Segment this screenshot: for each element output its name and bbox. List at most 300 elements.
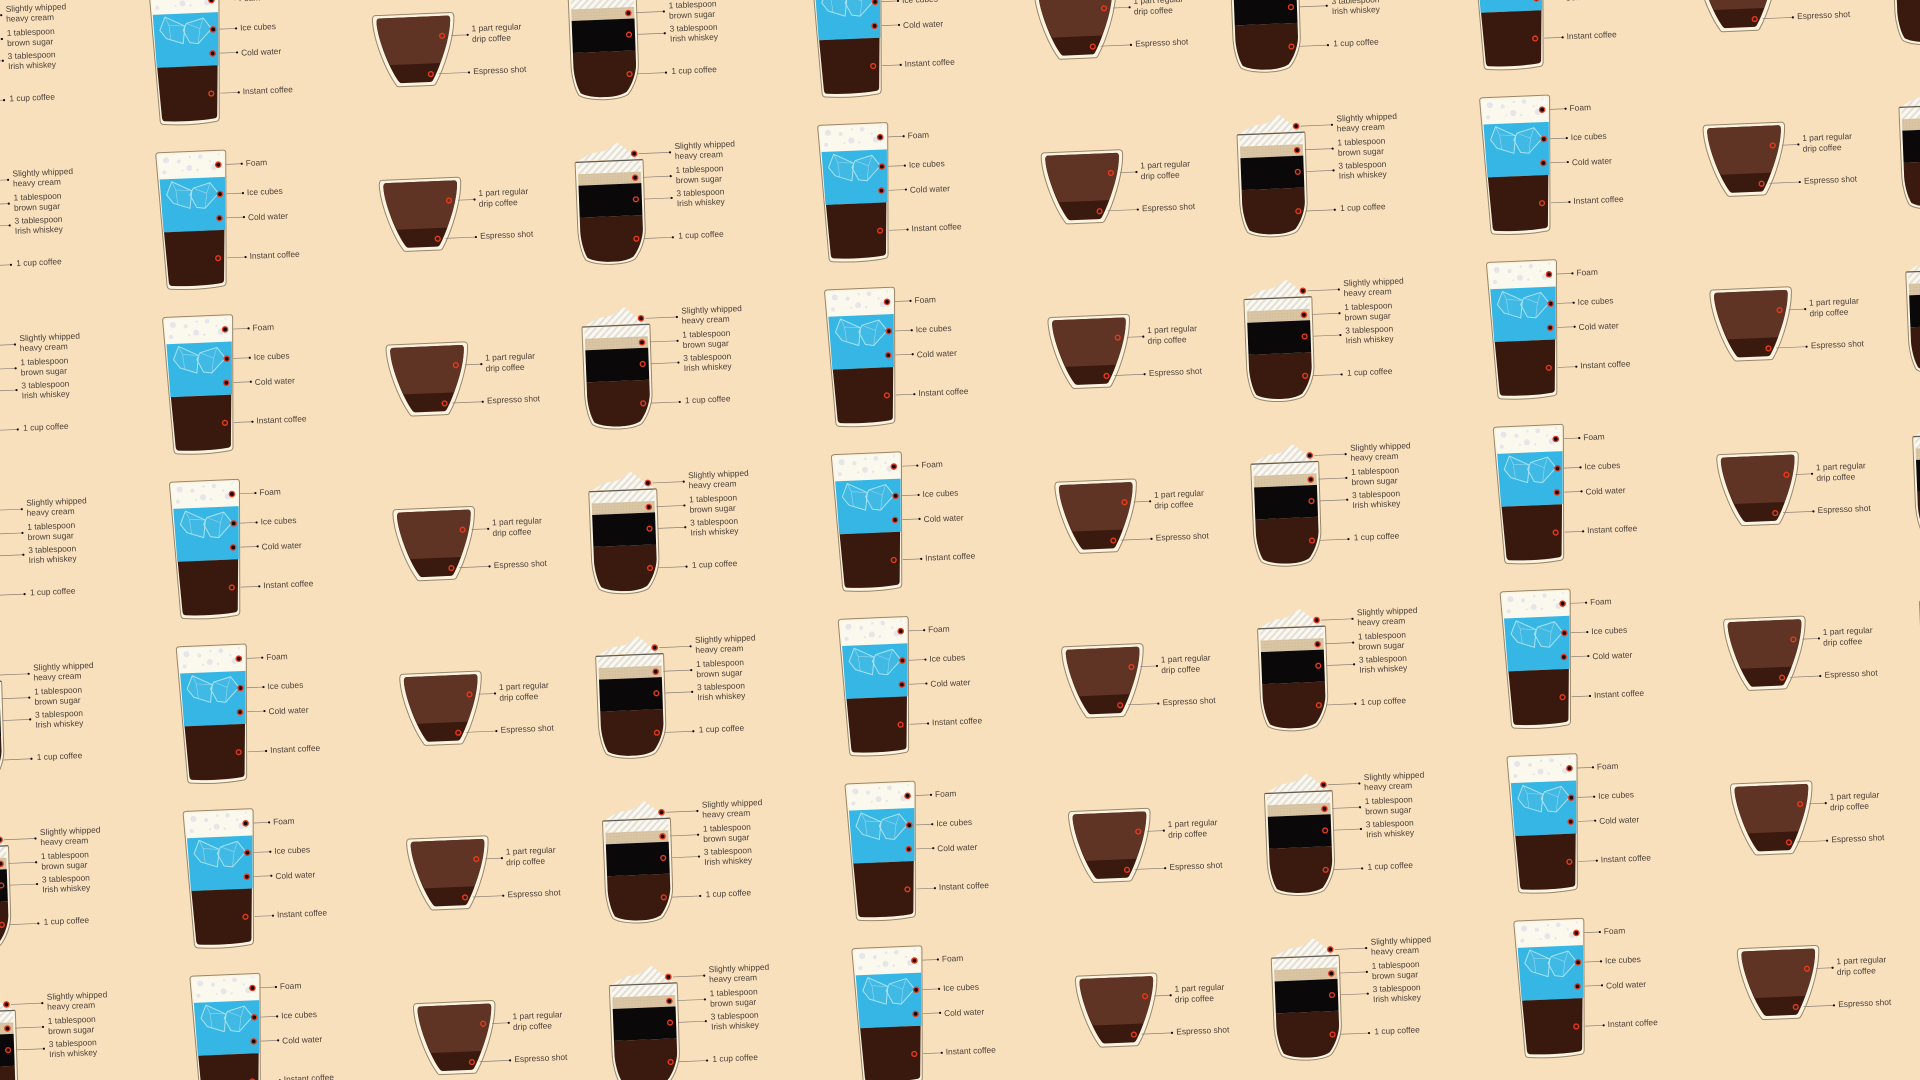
iced coffee pint diagram: Instant coffee: [1607, 1017, 1658, 1029]
iced coffee pint diagram: Ice cubes: [943, 982, 979, 993]
irish coffee diagram: heavy cream: [1371, 945, 1419, 957]
irish coffee diagram: 1 tablespoon: [703, 822, 751, 834]
irish coffee diagram: Irish whiskey: [28, 553, 78, 565]
irish coffee diagram: Irish whiskey: [35, 718, 84, 730]
irish coffee diagram: 3 tablespoon: [1372, 982, 1421, 994]
iced coffee pint diagram: Ice cubes: [922, 488, 959, 499]
iced coffee pint diagram: Instant coffee: [277, 907, 328, 920]
iced coffee pint diagram: Foam: [280, 980, 302, 991]
espresso cup diagram: Espresso shot: [473, 64, 527, 76]
irish coffee diagram: 3 tablespoon: [49, 1037, 97, 1049]
irish coffee diagram: 1 tablespoon: [709, 986, 758, 998]
irish coffee diagram: Irish whiskey: [677, 196, 726, 208]
iced coffee pint diagram: Cold water: [1592, 650, 1633, 661]
iced coffee pint diagram: [190, 970, 336, 1080]
espresso cup diagram: Espresso shot: [500, 723, 555, 735]
iced coffee pint diagram: [183, 806, 329, 949]
irish coffee diagram: 1 cup coffee: [699, 723, 745, 735]
iced coffee pint diagram: [156, 147, 301, 291]
iced coffee pint diagram: Cold water: [917, 348, 957, 359]
espresso cup diagram: Espresso shot: [1804, 174, 1858, 186]
iced coffee pint diagram: Instant coffee: [270, 743, 321, 755]
espresso cup diagram: 1 part regular: [1809, 296, 1859, 308]
iced coffee pint diagram: Foam: [273, 816, 295, 827]
irish coffee diagram: 1 cup coffee: [30, 586, 76, 597]
irish coffee diagram: 3 tablespoon: [704, 845, 752, 857]
espresso cup diagram: Espresso shot: [1811, 338, 1865, 350]
iced coffee pint diagram: Foam: [259, 486, 281, 497]
irish coffee diagram: Slightly whipped: [688, 468, 749, 480]
espresso cup diagram: drip coffee: [506, 856, 546, 867]
irish coffee diagram: heavy cream: [1364, 780, 1412, 792]
iced coffee pint diagram: Cold water: [1578, 320, 1619, 332]
irish coffee diagram: [581, 302, 747, 430]
iced coffee pint diagram: Ice cubes: [915, 323, 952, 334]
iced coffee pint diagram: Foam: [1590, 596, 1612, 607]
espresso cup diagram: 1 part regular: [1836, 954, 1886, 966]
espresso cup diagram: drip coffee: [1161, 664, 1201, 675]
iced coffee pint diagram: Foam: [1597, 761, 1619, 772]
espresso cup diagram: drip coffee: [479, 197, 518, 209]
espresso cup diagram: drip coffee: [1830, 801, 1870, 812]
iced coffee pint diagram: Foam: [1569, 102, 1591, 113]
espresso cup diagram: 1 part regular: [478, 186, 528, 198]
irish coffee diagram: brown sugar: [676, 173, 722, 185]
irish coffee diagram: brown sugar: [1338, 146, 1384, 158]
iced coffee pint diagram: [1486, 257, 1632, 400]
irish coffee diagram: 3 tablespoon: [35, 708, 84, 720]
espresso cup diagram: Espresso shot: [1831, 832, 1885, 844]
irish coffee diagram: Irish whiskey: [1339, 169, 1388, 181]
iced coffee pint diagram: Foam: [921, 459, 943, 470]
irish coffee diagram: Irish whiskey: [1345, 333, 1395, 345]
iced coffee pint diagram: Foam: [245, 157, 267, 168]
espresso cup diagram: drip coffee: [1823, 636, 1863, 648]
irish coffee diagram: Irish whiskey: [1332, 4, 1381, 16]
irish coffee diagram: Slightly whipped: [26, 495, 87, 508]
iced coffee pint diagram: Instant coffee: [263, 578, 314, 590]
irish coffee diagram: 1 cup coffee: [712, 1052, 758, 1064]
irish coffee diagram: 1 tablespoon: [41, 849, 89, 861]
irish coffee glass at right edge: [1919, 579, 1920, 705]
irish coffee diagram: 3 tablespoon: [683, 351, 732, 363]
irish coffee diagram: Irish whiskey: [711, 1020, 760, 1032]
irish coffee diagram: brown sugar: [1351, 475, 1398, 487]
irish coffee diagram: 3 tablespoon: [676, 186, 725, 198]
irish coffee diagram: [609, 961, 774, 1080]
espresso cup diagram: [1068, 805, 1224, 884]
irish coffee diagram: 1 tablespoon: [6, 26, 55, 38]
iced coffee pint diagram: [163, 312, 308, 455]
irish coffee diagram: Slightly whipped: [695, 632, 756, 645]
irish coffee diagram: [588, 467, 754, 595]
irish coffee diagram: 3 tablespoon: [1345, 323, 1394, 335]
iced coffee pint diagram: Instant coffee: [249, 249, 300, 261]
espresso cup diagram: drip coffee: [492, 526, 532, 538]
iced coffee pint diagram: [1493, 421, 1639, 565]
espresso cup diagram: [372, 9, 528, 88]
irish coffee glass at right edge: [1912, 415, 1920, 540]
irish coffee diagram: Slightly whipped: [40, 825, 101, 837]
irish coffee diagram: Slightly whipped: [681, 303, 742, 316]
espresso cup diagram: Espresso shot: [1169, 860, 1223, 872]
irish coffee diagram: 3 tablespoon: [690, 516, 739, 528]
iced coffee pint diagram: [1473, 0, 1618, 71]
irish coffee diagram: 1 tablespoon: [689, 492, 738, 504]
iced coffee pint diagram: Ice cubes: [254, 350, 290, 362]
espresso cup diagram: drip coffee: [485, 362, 525, 373]
irish coffee diagram: brown sugar: [683, 338, 729, 350]
espresso cup diagram: Espresso shot: [1838, 997, 1892, 1009]
iced coffee pint diagram: Ice cubes: [1591, 625, 1627, 636]
espresso cup diagram: drip coffee: [1802, 142, 1842, 154]
espresso cup diagram: Espresso shot: [1142, 201, 1196, 213]
espresso cup diagram: 1 part regular: [1829, 790, 1880, 802]
iced coffee pint diagram: Foam: [928, 624, 950, 634]
irish coffee diagram: 1 cup coffee: [1354, 530, 1400, 542]
iced coffee pint diagram: Cold water: [268, 705, 309, 716]
iced coffee pint diagram: Cold water: [282, 1034, 323, 1046]
espresso cup diagram: 1 part regular: [492, 515, 542, 527]
irish coffee diagram: 1 cup coffee: [9, 92, 55, 103]
irish coffee diagram: Slightly whipped: [1357, 605, 1418, 617]
iced coffee pint diagram: Instant coffee: [256, 413, 307, 426]
espresso cup diagram: [413, 997, 569, 1076]
irish coffee diagram: [602, 796, 767, 924]
irish coffee diagram: heavy cream: [1337, 121, 1385, 133]
iced coffee pint diagram: [824, 284, 970, 428]
iced coffee pint diagram: Instant coffee: [1580, 358, 1631, 371]
irish coffee diagram: Irish whiskey: [683, 361, 733, 373]
irish coffee diagram: [1243, 275, 1409, 403]
espresso cup diagram: Espresso shot: [494, 558, 548, 570]
iced coffee pint diagram: [176, 641, 322, 785]
irish coffee diagram: heavy cream: [6, 12, 54, 24]
irish coffee diagram: heavy cream: [709, 972, 757, 984]
iced coffee pint diagram: [811, 0, 956, 98]
iced coffee pint diagram: Ice cubes: [281, 1009, 317, 1021]
iced coffee pint diagram: Instant coffee: [243, 84, 293, 96]
irish coffee glass at right edge: [1891, 0, 1920, 46]
espresso cup diagram: drip coffee: [1175, 993, 1214, 1005]
irish coffee diagram: heavy cream: [702, 808, 750, 820]
irish coffee diagram: Irish whiskey: [22, 388, 71, 400]
irish coffee diagram: brown sugar: [696, 667, 743, 679]
iced coffee pint diagram: Cold water: [930, 677, 971, 689]
irish coffee diagram: 3 tablespoon: [28, 543, 77, 555]
iced coffee pint diagram: [818, 120, 963, 263]
espresso cup diagram: drip coffee: [499, 691, 539, 703]
irish coffee diagram: 1 tablespoon: [696, 657, 744, 669]
espresso cup diagram: drip coffee: [1154, 499, 1194, 511]
espresso cup diagram: [1041, 147, 1196, 225]
iced coffee pint diagram: Ice cubes: [260, 515, 297, 527]
irish coffee diagram: Irish whiskey: [1366, 827, 1415, 839]
irish coffee diagram: heavy cream: [1357, 615, 1405, 627]
irish coffee diagram: [1264, 769, 1429, 897]
irish coffee diagram: brown sugar: [1372, 969, 1419, 981]
iced coffee pint diagram: Ice cubes: [929, 652, 965, 664]
espresso cup diagram: drip coffee: [1837, 965, 1876, 977]
espresso cup diagram: [1075, 970, 1230, 1048]
espresso cup diagram: [1062, 641, 1217, 719]
irish coffee diagram: 1 cup coffee: [1340, 201, 1386, 213]
iced coffee pint diagram: Cold water: [937, 842, 978, 853]
irish coffee diagram: Slightly whipped: [702, 797, 763, 810]
iced coffee pint diagram: Instant coffee: [939, 880, 990, 892]
irish coffee diagram: heavy cream: [695, 643, 744, 655]
irish coffee diagram: [0, 330, 85, 458]
iced coffee pint diagram: Cold water: [275, 869, 316, 881]
espresso cup diagram: [1717, 448, 1872, 527]
iced coffee pint diagram: Cold water: [1606, 979, 1646, 991]
irish coffee diagram: brown sugar: [710, 997, 757, 1009]
espresso cup diagram: 1 part regular: [1174, 982, 1224, 994]
espresso cup diagram: [1055, 476, 1210, 554]
iced coffee pint diagram: Cold water: [255, 375, 295, 387]
irish coffee diagram: [567, 0, 733, 101]
espresso cup diagram: Espresso shot: [487, 393, 541, 405]
irish coffee diagram: brown sugar: [21, 366, 67, 377]
irish coffee diagram: 1 tablespoon: [13, 191, 62, 203]
irish coffee diagram: [0, 988, 112, 1080]
irish coffee diagram: Irish whiskey: [1373, 992, 1422, 1004]
espresso cup diagram: [1710, 284, 1865, 362]
irish coffee diagram: brown sugar: [703, 832, 750, 844]
irish coffee diagram: 1 cup coffee: [1347, 366, 1393, 378]
irish coffee diagram: 1 tablespoon: [1344, 300, 1393, 312]
espresso cup diagram: Espresso shot: [1824, 668, 1878, 680]
espresso cup diagram: drip coffee: [1809, 307, 1849, 318]
irish coffee diagram: Slightly whipped: [12, 166, 73, 178]
irish coffee diagram: [0, 824, 106, 952]
espresso cup diagram: 1 part regular: [1823, 625, 1873, 637]
espresso cup diagram: 1 part regular: [506, 845, 556, 857]
irish coffee diagram: 1 cup coffee: [37, 750, 83, 762]
irish coffee diagram: 3 tablespoon: [1366, 817, 1414, 829]
irish coffee diagram: 1 tablespoon: [1337, 136, 1386, 148]
irish coffee diagram: brown sugar: [41, 860, 88, 871]
irish coffee diagram: 1 cup coffee: [678, 229, 724, 241]
irish coffee diagram: Slightly whipped: [5, 1, 66, 14]
iced coffee pint diagram: [831, 449, 977, 592]
iced coffee pint diagram: Foam: [907, 130, 929, 140]
irish coffee diagram: 3 tablespoon: [1338, 159, 1387, 171]
iced coffee pint diagram: Ice cubes: [274, 844, 310, 856]
espresso cup diagram: [379, 174, 534, 252]
espresso cup diagram: 1 part regular: [1147, 323, 1197, 335]
espresso cup diagram: drip coffee: [513, 1020, 552, 1032]
irish coffee diagram: 3 tablespoon: [1352, 488, 1401, 500]
irish coffee diagram: 3 tablespoon: [1359, 653, 1407, 665]
irish coffee diagram: [1257, 604, 1423, 732]
iced coffee pint diagram: Foam: [914, 294, 936, 305]
espresso cup diagram: drip coffee: [1134, 5, 1173, 17]
irish coffee diagram: [0, 0, 71, 129]
irish coffee diagram: heavy cream: [682, 314, 730, 326]
iced coffee pint diagram: Instant coffee: [932, 715, 983, 727]
irish coffee diagram: Irish whiskey: [704, 855, 753, 867]
irish coffee diagram: Irish whiskey: [49, 1047, 98, 1059]
iced coffee pint diagram: Instant coffee: [911, 221, 962, 233]
iced coffee pint diagram: Ice cubes: [1577, 295, 1614, 307]
espresso cup diagram: [406, 833, 562, 911]
espresso cup diagram: [1696, 0, 1851, 33]
espresso cup diagram: 1 part regular: [1140, 158, 1190, 171]
irish coffee diagram: Slightly whipped: [33, 660, 94, 672]
iced coffee pint diagram: Instant coffee: [1573, 194, 1624, 206]
iced coffee pint diagram: Ice cubes: [1584, 460, 1621, 472]
irish coffee diagram: Irish whiskey: [690, 526, 739, 538]
iced coffee pint diagram: Ice cubes: [240, 21, 276, 33]
irish coffee diagram: [0, 494, 92, 623]
irish coffee diagram: [1250, 439, 1416, 568]
irish coffee diagram: 1 cup coffee: [1367, 860, 1413, 872]
irish coffee diagram: heavy cream: [26, 506, 75, 518]
iced coffee pint diagram: Cold water: [248, 211, 288, 222]
irish coffee diagram: Slightly whipped: [19, 331, 80, 343]
irish coffee diagram: 1 cup coffee: [685, 393, 731, 405]
irish coffee diagram: [0, 659, 99, 787]
espresso cup diagram: drip coffee: [1147, 334, 1187, 346]
irish coffee diagram: 1 tablespoon: [1365, 794, 1413, 806]
irish coffee diagram: 1 tablespoon: [48, 1014, 96, 1026]
irish coffee diagram: heavy cream: [675, 149, 723, 161]
espresso cup diagram: [1737, 942, 1892, 1021]
irish coffee diagram: [0, 165, 78, 293]
irish coffee diagram: Slightly whipped: [1364, 770, 1424, 782]
irish coffee diagram: heavy cream: [47, 1000, 95, 1012]
irish coffee diagram: Irish whiskey: [670, 32, 719, 44]
espresso cup diagram: 1 part regular: [1802, 131, 1852, 143]
irish coffee diagram: 1 cup coffee: [692, 558, 738, 570]
espresso cup diagram: Espresso shot: [480, 229, 534, 241]
iced coffee pint diagram: Foam: [1583, 431, 1605, 442]
irish coffee diagram: Slightly whipped: [1343, 276, 1404, 288]
iced coffee pint diagram: Instant coffee: [1601, 852, 1651, 864]
irish coffee diagram: Irish whiskey: [697, 690, 746, 702]
espresso cup diagram: [1048, 311, 1203, 390]
espresso cup diagram: drip coffee: [1141, 170, 1180, 181]
iced coffee pint diagram: Instant coffee: [1594, 688, 1645, 700]
espresso cup diagram: Espresso shot: [1817, 503, 1872, 515]
iced coffee pint diagram: Foam: [942, 953, 963, 964]
espresso cup diagram: [1730, 778, 1886, 856]
iced coffee pint diagram: Cold water: [1585, 485, 1626, 497]
irish coffee diagram: Irish whiskey: [1359, 663, 1408, 675]
espresso cup diagram: Espresso shot: [1156, 530, 1210, 543]
irish coffee diagram: brown sugar: [48, 1024, 95, 1036]
irish coffee diagram: Irish whiskey: [8, 59, 57, 71]
iced coffee pint diagram: [1507, 751, 1653, 894]
irish coffee diagram: 1 tablespoon: [20, 355, 69, 367]
irish coffee diagram: 1 tablespoon: [27, 520, 76, 532]
iced coffee pint diagram: Ice cubes: [247, 186, 283, 197]
irish coffee diagram: 1 cup coffee: [1333, 37, 1379, 48]
irish coffee diagram: heavy cream: [33, 670, 82, 682]
irish coffee diagram: heavy cream: [688, 478, 737, 490]
iced coffee pint diagram: Ice cubes: [909, 158, 945, 170]
irish coffee diagram: brown sugar: [669, 9, 716, 21]
irish coffee diagram: Slightly whipped: [1350, 440, 1411, 453]
espresso cup diagram: [393, 503, 548, 582]
espresso cup diagram: 1 part regular: [471, 21, 521, 33]
irish coffee diagram: heavy cream: [1350, 451, 1399, 463]
irish coffee diagram: [1236, 110, 1402, 238]
iced coffee pint diagram: Instant coffee: [925, 551, 976, 563]
espresso cup diagram: Espresso shot: [1176, 1024, 1230, 1037]
irish coffee diagram: 3 tablespoon: [697, 680, 745, 692]
espresso cup diagram: 1 part regular: [1816, 460, 1866, 472]
iced coffee pint diagram: Cold water: [1599, 814, 1640, 826]
irish coffee diagram: 3 tablespoon: [21, 378, 70, 390]
irish coffee diagram: 3 tablespoon: [7, 49, 56, 61]
irish coffee diagram: 3 tablespoon: [669, 22, 718, 34]
iced coffee pint diagram: Instant coffee: [1587, 523, 1638, 535]
iced coffee pint diagram: Foam: [252, 322, 274, 333]
irish coffee diagram: 1 tablespoon: [675, 163, 724, 175]
irish coffee diagram: brown sugar: [34, 695, 81, 707]
espresso cup diagram: Espresso shot: [1797, 9, 1851, 21]
iced coffee pint diagram: Instant coffee: [1566, 29, 1617, 41]
irish coffee diagram: Slightly whipped: [47, 989, 107, 1002]
irish coffee diagram: 3 tablespoon: [42, 872, 90, 884]
irish coffee diagram: brown sugar: [1344, 311, 1391, 322]
iced coffee pint diagram: Cold water: [944, 1006, 985, 1018]
irish coffee diagram: heavy cream: [1343, 286, 1392, 298]
irish coffee diagram: 1 tablespoon: [682, 328, 731, 340]
iced coffee pint diagram: [845, 778, 991, 922]
irish coffee diagram: 1 cup coffee: [1374, 1024, 1420, 1036]
espresso cup diagram: drip coffee: [1168, 828, 1208, 840]
espresso cup diagram: [1703, 119, 1858, 197]
irish coffee diagram: [574, 138, 740, 266]
irish coffee diagram: 1 cup coffee: [23, 421, 69, 433]
irish coffee diagram: Slightly whipped: [708, 962, 769, 974]
irish coffee diagram: 1 cup coffee: [671, 64, 717, 76]
irish coffee glass at right edge: [1905, 250, 1920, 375]
irish coffee diagram: [1270, 933, 1436, 1061]
irish coffee diagram: brown sugar: [14, 201, 60, 213]
espresso cup diagram: [400, 668, 555, 746]
irish coffee diagram: Slightly whipped: [1370, 934, 1431, 947]
irish coffee diagram: heavy cream: [40, 835, 88, 847]
espresso cup diagram: Espresso shot: [1162, 695, 1216, 707]
irish coffee diagram: brown sugar: [1365, 805, 1412, 816]
iced coffee pint diagram: Ice cubes: [1605, 954, 1641, 966]
espresso cup diagram: Espresso shot: [1135, 36, 1189, 49]
irish coffee diagram: [1229, 0, 1395, 74]
iced coffee pint diagram: Ice cubes: [1598, 789, 1634, 801]
iced coffee pint diagram: Cold water: [923, 512, 964, 524]
iced coffee pint diagram: Foam: [935, 788, 957, 799]
iced coffee pint diagram: Foam: [1576, 267, 1598, 278]
iced coffee pint diagram: Cold water: [261, 540, 302, 552]
espresso cup diagram: 1 part regular: [499, 680, 549, 692]
espresso cup diagram: [1034, 0, 1189, 60]
iced coffee pint diagram: [838, 614, 984, 757]
iced coffee pint diagram: Instant coffee: [904, 57, 955, 69]
irish coffee diagram: brown sugar: [27, 530, 74, 542]
espresso cup diagram: Espresso shot: [507, 887, 561, 899]
irish coffee diagram: Slightly whipped: [674, 138, 735, 151]
iced coffee pint diagram: [1514, 915, 1659, 1059]
irish coffee diagram: Slightly whipped: [1336, 111, 1397, 123]
irish coffee diagram: 3 tablespoon: [14, 214, 63, 226]
espresso cup diagram: Espresso shot: [1149, 366, 1203, 378]
iced coffee pint diagram: Ice cubes: [936, 817, 972, 828]
irish coffee diagram: 1 cup coffee: [16, 256, 62, 268]
